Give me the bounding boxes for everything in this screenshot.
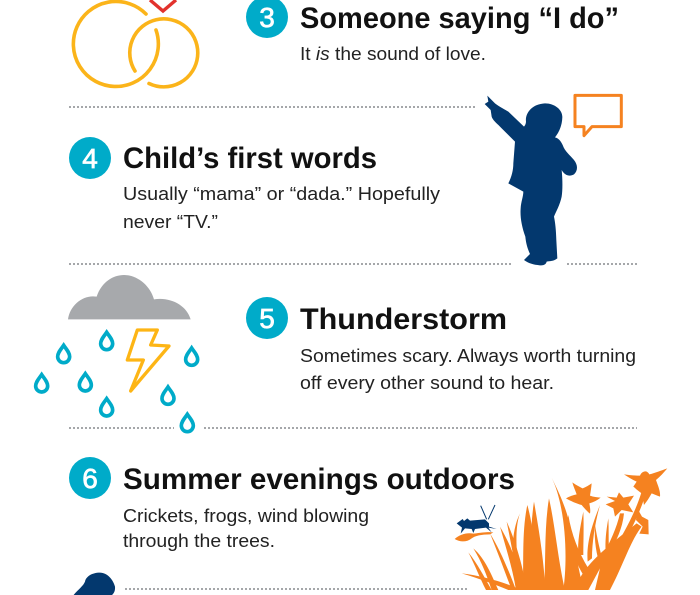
bud (455, 532, 493, 541)
badge 6 (69, 457, 111, 499)
body 5: off every other sound to hear. (300, 373, 554, 393)
body 6: through the trees. (123, 531, 275, 551)
section 3: someone saying I do (246, 0, 619, 64)
badge 5: 5 (259, 303, 275, 334)
heading 5: Thunderstorm (300, 303, 507, 336)
body 5: Sometimes scary. Always worth turning (300, 346, 636, 366)
section 4: child's first words (69, 137, 440, 232)
flowers (566, 482, 601, 514)
icon: wedding rings and heart (73, 0, 198, 87)
grass blades (552, 478, 583, 590)
badge 5 (246, 297, 288, 339)
section 5: thunderstorm (246, 297, 636, 393)
cloud (68, 275, 191, 319)
icon: navy hat partial silhouette (73, 573, 115, 595)
icon: child silhouette pointing (485, 96, 577, 265)
rain drops (36, 332, 198, 432)
lightning bolt (127, 330, 169, 391)
heading 6: Summer evenings outdoors (123, 463, 515, 496)
badge 6: 6 (82, 463, 98, 494)
heading 3: Someone saying “I do” (300, 2, 619, 35)
icon: cricket (457, 505, 497, 534)
icon: storm cloud with rain and lightning (36, 275, 198, 432)
body 3: It is the sound of love. (300, 44, 486, 64)
body 6: Crickets, frogs, wind blowing (123, 506, 369, 526)
badge 3: 3 (259, 2, 275, 33)
body 4: never “TV.” (123, 212, 218, 232)
badge 4: 4 (82, 143, 98, 174)
badge 3 (246, 0, 288, 38)
icon: speech bubble (575, 95, 621, 136)
badge 4 (69, 137, 111, 179)
body 4: Usually “mama” or “dada.” Hopefully (123, 184, 440, 204)
icon: orange grass and flowers (455, 468, 667, 590)
section 6: summer evenings outdoors (69, 457, 515, 551)
heading 4: Child’s first words (123, 142, 377, 175)
